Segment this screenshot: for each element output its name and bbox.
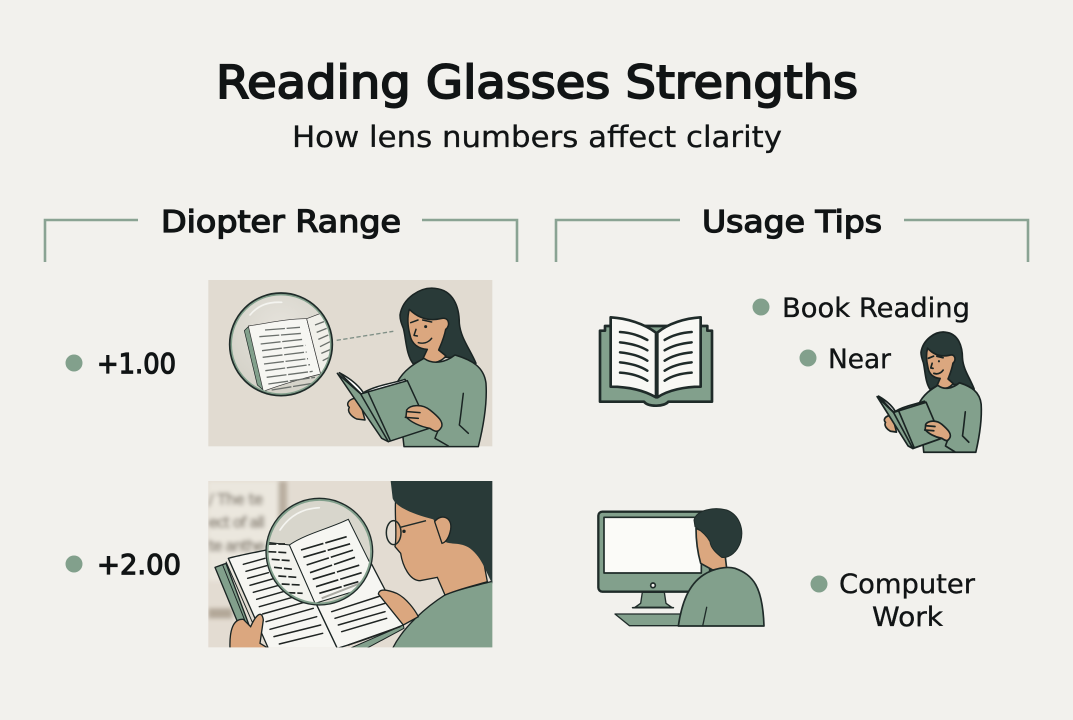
panel: +2.00 illustration, person with glasses and magnifier over book	[208, 481, 493, 648]
heading: usage tips: Usage Tips	[702, 205, 882, 240]
person face	[395, 500, 487, 595]
label: +2.00 diopter: +2.00	[97, 548, 181, 581]
bracket: usage tips	[556, 220, 1028, 262]
open book	[214, 550, 404, 648]
ear	[435, 517, 451, 543]
icon: person at computer	[598, 509, 764, 626]
woman with book	[337, 288, 486, 447]
person body	[393, 581, 493, 648]
tip: near: Near	[828, 344, 892, 375]
heading: diopter range: Diopter Range	[161, 205, 401, 240]
tip: near	[800, 344, 892, 375]
magnifier lens	[263, 498, 380, 605]
blurred background shelf text: te anthe	[208, 537, 265, 555]
person hair	[391, 481, 493, 585]
bracket: diopter range	[45, 220, 517, 262]
left hand	[230, 614, 268, 648]
title: Reading Glasses Strengths	[216, 56, 858, 109]
subtitle: How lens numbers affect clarity	[292, 120, 782, 154]
tip: computer work: Computer	[839, 569, 976, 600]
right hand	[378, 590, 418, 625]
icon: woman reading a book	[877, 332, 981, 452]
blurred background shelf text: / The te	[208, 490, 263, 508]
magnifier lens showing page	[230, 293, 337, 396]
tip: computer work	[810, 569, 976, 633]
label: +1.00 diopter: +1.00	[97, 347, 176, 380]
tip: book reading: Book Reading	[782, 293, 970, 324]
blurred background shelf text	[208, 481, 287, 618]
tip: computer work: Work	[872, 602, 943, 633]
person seen from behind	[678, 509, 764, 626]
dashed sight line	[337, 331, 393, 340]
monitor	[598, 512, 710, 626]
icon: open book	[600, 317, 712, 406]
panel: +1.00 illustration, woman reading with magnifier	[208, 280, 492, 447]
glasses	[386, 521, 426, 545]
label: +1.00 diopter	[66, 347, 176, 380]
section: diopter range heading with bracket	[45, 205, 517, 262]
blurred background shelf text: ect of all	[208, 513, 265, 531]
section: usage tips heading with bracket	[556, 205, 1028, 262]
